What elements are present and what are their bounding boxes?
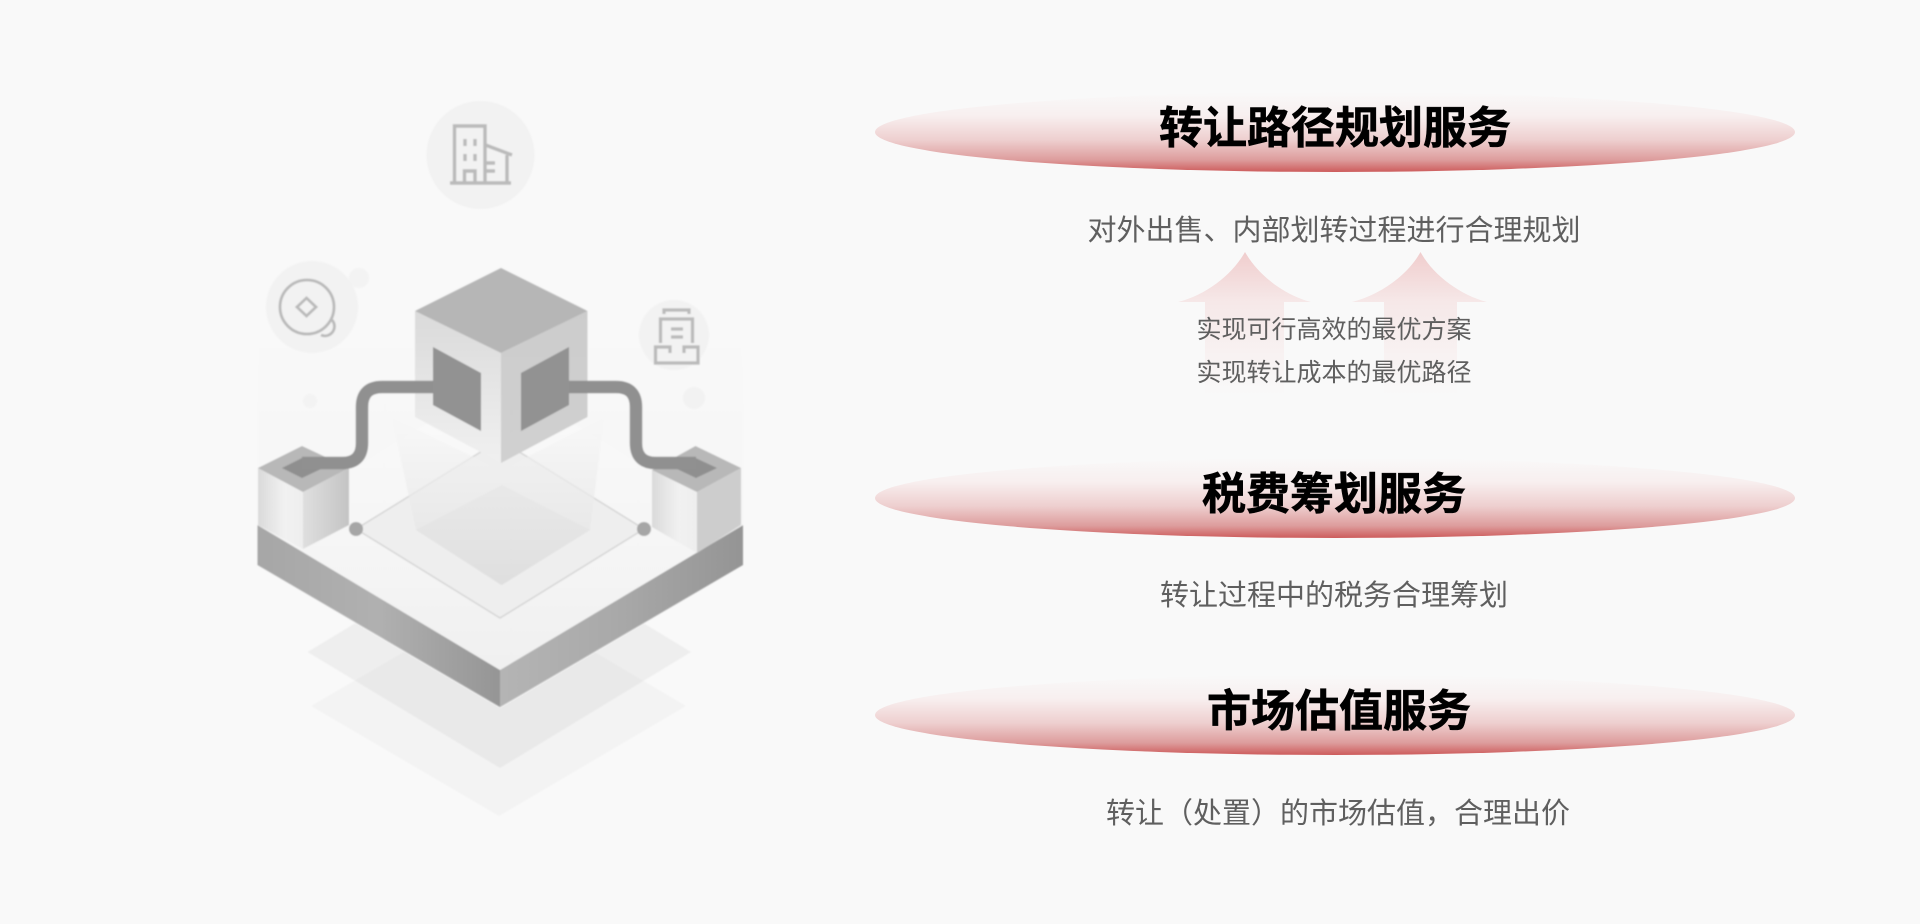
supporting lines xyxy=(1196,316,1472,387)
icon: coin xyxy=(266,261,369,353)
supporting lines: 实现可行高效的最优方案 xyxy=(1196,316,1472,344)
inner floor square xyxy=(416,485,590,585)
supporting lines: 实现转让成本的最优路径 xyxy=(1196,359,1472,387)
floor nodes xyxy=(349,522,651,536)
illustration: isometric platform xyxy=(258,268,743,816)
heading 2: 税费筹划服务 xyxy=(1202,470,1466,519)
decorative dot: left xyxy=(303,394,317,408)
cube xyxy=(415,268,588,463)
section: route planning xyxy=(875,92,1795,395)
description 3: 转让（处置）的市场估值，合理出价 xyxy=(1106,797,1570,830)
decorative dot: right xyxy=(683,387,705,409)
heading 1: 转让路径规划服务 xyxy=(1159,104,1511,153)
cube windows xyxy=(433,347,569,431)
outlined floor square xyxy=(356,440,644,618)
ellipse banner 3 xyxy=(875,675,1795,755)
description 2: 转让过程中的税务合理筹划 xyxy=(1160,579,1508,612)
arrow right xyxy=(1352,252,1487,395)
description 1: 对外出售、内部划转过程进行合理规划 xyxy=(1087,214,1581,247)
section: valuation xyxy=(875,675,1795,830)
ellipse banner 2 xyxy=(875,458,1795,538)
shadow layers xyxy=(308,536,691,816)
left block xyxy=(258,446,349,549)
arrow left xyxy=(1178,252,1311,395)
ellipse banner 1 xyxy=(875,92,1795,172)
right block xyxy=(652,446,741,553)
light beams xyxy=(392,418,604,585)
section: tax planning xyxy=(875,458,1795,612)
icon: stamp xyxy=(639,300,709,370)
icon: building xyxy=(426,101,534,209)
pipes xyxy=(302,387,696,463)
platform xyxy=(258,380,743,707)
heading 3: 市场估值服务 xyxy=(1207,687,1471,736)
backdrop panel xyxy=(258,310,743,530)
